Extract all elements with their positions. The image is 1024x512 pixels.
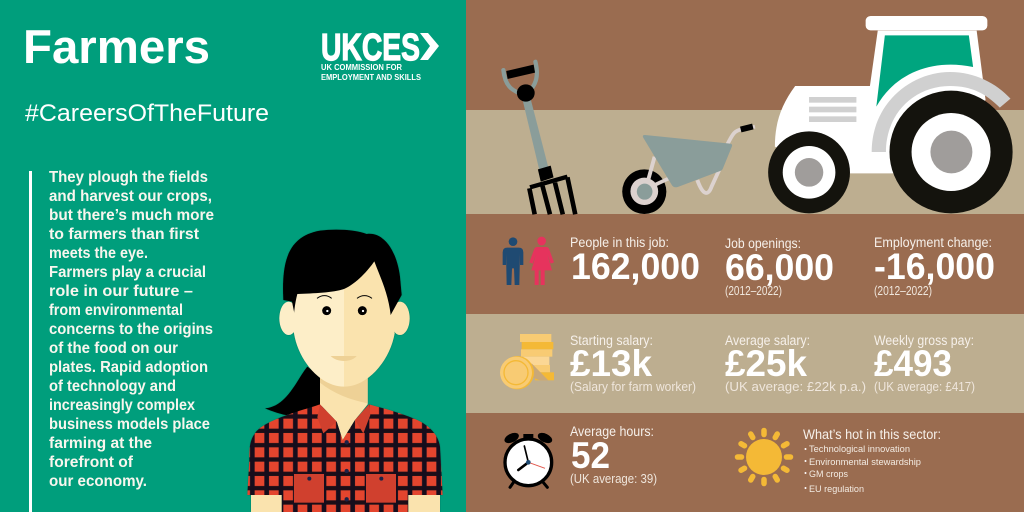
intro rule <box>29 171 32 512</box>
stat: employment change: -16,000 <box>874 246 995 287</box>
stat: job openings: 66,000 <box>725 247 834 288</box>
tractor fender <box>872 72 1010 152</box>
panel: green intro <box>0 0 466 512</box>
list: what's hot in this sector <box>803 427 941 495</box>
stat: job openings: Job openings: <box>725 236 801 251</box>
tractor body <box>775 31 986 173</box>
illustration: tools and tractor <box>503 16 1013 214</box>
band: people stats <box>466 214 1024 314</box>
big wheel <box>889 91 1013 213</box>
buttons <box>307 440 383 501</box>
left collar <box>317 404 337 433</box>
tractor <box>768 16 1013 213</box>
stat: starting salary: £13k <box>570 343 652 384</box>
right collar <box>355 404 370 433</box>
band: hours and sector <box>466 413 1024 512</box>
band: salary stats <box>466 314 1024 413</box>
left pocket <box>294 474 324 503</box>
stat: average salary <box>725 333 866 394</box>
stat: employment change: (2012–2022) <box>874 284 932 298</box>
intro text: but there’s much more <box>49 207 214 224</box>
stat: starting salary: Starting salary: <box>570 333 653 348</box>
title: Farmers <box>23 21 210 74</box>
intro text: plates. Rapid adoption <box>49 359 208 376</box>
icon: alarm clock <box>503 431 554 487</box>
intro text: forefront of <box>49 454 134 471</box>
band: tan ground <box>466 110 1024 214</box>
hair <box>283 230 402 317</box>
tractor vents <box>809 97 856 122</box>
stat: weekly gross pay: (UK average: £417) <box>874 380 975 394</box>
stat: average salary: £25k <box>725 343 807 384</box>
ponytail <box>265 367 320 415</box>
stat: average salary: Average salary: <box>725 333 810 348</box>
face right half <box>344 261 395 387</box>
stat: average hours <box>570 424 657 486</box>
logo: UKCES <box>321 27 439 82</box>
stat: weekly gross pay: Weekly gross pay: <box>874 333 974 348</box>
shirt <box>247 404 443 512</box>
intro text: business models place <box>49 416 210 433</box>
intro text: meets the eye. <box>49 245 148 262</box>
neck shadow <box>320 375 368 403</box>
intro text: increasingly complex <box>49 397 195 414</box>
stat: starting salary: (Salary for farm worker) <box>570 380 696 394</box>
stat: employment change: Employment change: <box>874 235 992 250</box>
icon: coins <box>500 334 554 389</box>
eyebrows <box>317 296 372 298</box>
wheelbarrow <box>622 124 755 214</box>
neck <box>320 373 368 440</box>
stat: starting salary <box>570 333 696 394</box>
farmer illustration <box>240 230 453 512</box>
intro text: They plough the fields <box>49 169 208 186</box>
intro text: farming at the <box>49 435 152 452</box>
stat: job openings <box>725 236 834 298</box>
logo: UKCES: UK COMMISSION FOR <box>321 63 402 72</box>
intro text: to farmers than first <box>49 226 199 243</box>
intro text: concerns to the origins <box>49 321 213 338</box>
intro text: our economy. <box>49 473 147 490</box>
intro text: of the food on our <box>49 340 178 357</box>
stat: weekly gross pay <box>874 333 975 394</box>
stat: job openings: (2012–2022) <box>725 284 782 298</box>
list: what's hot in this sector: Environmental stewardship <box>809 457 921 468</box>
tractor roof <box>866 16 987 30</box>
stat: average hours: (UK average: 39) <box>570 472 657 486</box>
face left half <box>293 289 344 387</box>
icon: sun <box>738 430 790 484</box>
stat: people in this job: 162,000 <box>571 246 700 287</box>
stat: employment change <box>874 235 995 298</box>
pitchfork <box>503 62 575 214</box>
stat: people in this job: People in this job: <box>570 235 669 250</box>
mouth <box>331 356 357 361</box>
intro text: Farmers play a crucial <box>49 264 206 281</box>
hashtag: #CareersOfTheFuture <box>25 100 269 127</box>
right arm <box>408 495 440 512</box>
intro text: from environmental <box>49 302 183 319</box>
left ear <box>279 302 298 335</box>
stat: average hours: 52 <box>571 435 610 476</box>
list: what's hot in this sector: Technological innovation <box>809 444 910 455</box>
intro text <box>49 169 214 490</box>
right ear <box>390 302 410 335</box>
intro text: role in our future – <box>49 283 193 300</box>
eyes <box>322 306 367 315</box>
list: what's hot in this sector: What’s hot in this sector: <box>803 427 941 442</box>
stat: weekly gross pay: £493 <box>874 343 952 384</box>
left arm <box>251 495 282 512</box>
tractor window <box>876 35 973 107</box>
stat: average salary: (UK average: £22k p.a.) <box>725 380 866 394</box>
band: top brown <box>466 0 1024 110</box>
right pocket <box>366 474 396 503</box>
intro text: and harvest our crops, <box>49 188 212 205</box>
list: what's hot in this sector: EU regulation <box>809 484 864 495</box>
small wheel <box>768 131 850 213</box>
logo: UKCES: UKCES <box>321 27 420 69</box>
stat: average hours: Average hours: <box>570 424 654 439</box>
logo: UKCES: EMPLOYMENT AND SKILLS <box>321 73 422 82</box>
icon: man and woman <box>503 237 554 285</box>
intro text: of technology and <box>49 378 176 395</box>
list: what's hot in this sector: GM crops <box>809 469 848 480</box>
